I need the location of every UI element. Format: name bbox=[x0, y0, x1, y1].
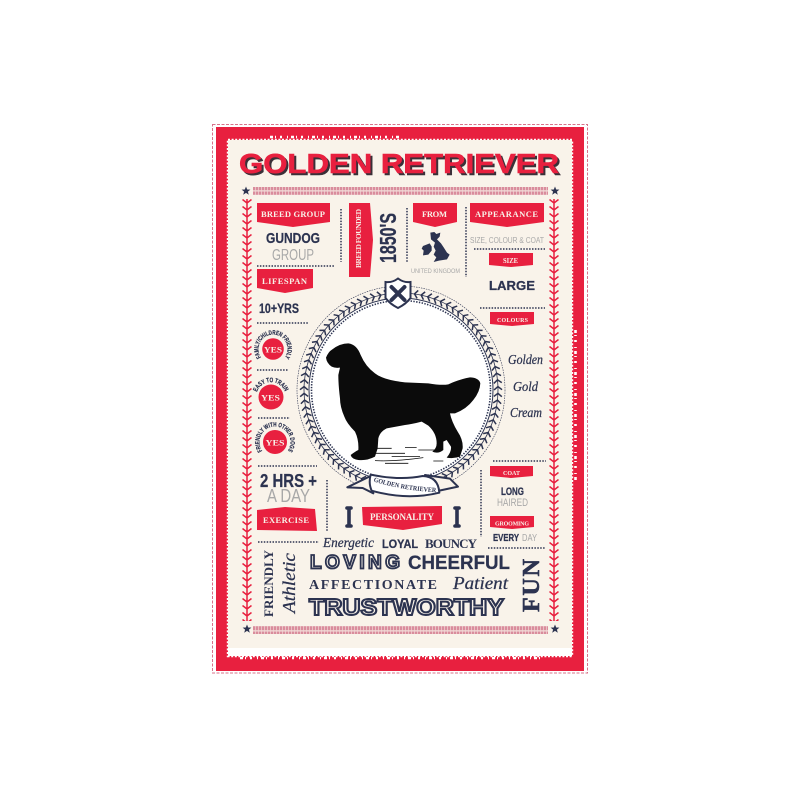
breed founded: 1850'S bbox=[375, 213, 401, 263]
lifespan: 10+YRS bbox=[259, 301, 299, 316]
colours: Gold bbox=[513, 380, 539, 395]
exercise: A DAY bbox=[267, 486, 310, 506]
icon: bone right bbox=[455, 508, 459, 526]
appearance: SIZE, COLOUR & COAT bbox=[470, 236, 544, 245]
breed founded: BREED FOUNDED bbox=[354, 208, 363, 268]
dog silhouette bbox=[326, 343, 480, 463]
from: united kingdom: UNITED KINGDOM bbox=[411, 268, 460, 275]
ribbon banner: GOLDEN RETRIEVER bbox=[374, 478, 436, 492]
top stripe divider bbox=[242, 186, 559, 195]
cream paper panel bbox=[228, 140, 572, 648]
size: SIZE bbox=[503, 257, 518, 265]
coat: COAT bbox=[503, 470, 521, 477]
personality bbox=[347, 506, 459, 530]
personality: PERSONALITY bbox=[370, 512, 434, 522]
grooming bbox=[490, 516, 537, 544]
badge: easy to train bbox=[252, 378, 289, 410]
shield emblem bbox=[386, 278, 410, 308]
icon: UK map bbox=[422, 232, 450, 262]
left herringbone border bbox=[241, 199, 253, 621]
badge: friendly with other dogs: FRIENDLY WITH OTHER DOGS bbox=[254, 422, 295, 453]
appearance: APPEARANCE bbox=[475, 209, 538, 219]
breed group: GROUP bbox=[272, 247, 314, 264]
from: united kingdom bbox=[411, 203, 460, 275]
size: LARGE bbox=[489, 279, 535, 293]
colours: Golden bbox=[508, 353, 543, 368]
personality word cloud bbox=[261, 536, 545, 620]
personality word cloud: Athletic bbox=[279, 553, 299, 614]
personality word cloud: BOUNCY bbox=[425, 536, 478, 551]
personality word cloud: CHEERFUL bbox=[408, 553, 510, 574]
icon: bone left bbox=[347, 508, 351, 526]
red frame bbox=[216, 127, 584, 671]
coat bbox=[490, 466, 533, 509]
right herringbone border bbox=[548, 199, 560, 621]
size bbox=[489, 253, 535, 293]
personality word cloud: LOVING bbox=[310, 552, 400, 574]
coat: HAIRED bbox=[497, 497, 528, 509]
badge: family / children friendly: FAMILY/CHILDREN FRIENDLY bbox=[254, 330, 292, 360]
exercise bbox=[257, 471, 317, 531]
personality word cloud: TRUSTWORTHY bbox=[309, 594, 504, 620]
personality word cloud: Patient bbox=[452, 573, 509, 593]
poster border: dashed outline bbox=[212, 124, 588, 673]
ground marks bbox=[375, 448, 443, 463]
breed founded bbox=[349, 203, 401, 277]
badge: easy to train: EASY TO TRAIN bbox=[252, 378, 289, 392]
grooming: EVERY bbox=[493, 533, 519, 544]
personality word cloud: LOYAL bbox=[382, 537, 418, 551]
title: GOLDEN RETRIEVER bbox=[239, 148, 559, 179]
personality word cloud: FUN bbox=[519, 558, 545, 612]
colours: COLOURS bbox=[497, 318, 529, 324]
worn paper edges bbox=[240, 137, 576, 658]
ribbon banner bbox=[346, 474, 459, 498]
exercise: EXERCISE bbox=[263, 515, 309, 525]
personality word cloud: Energetic bbox=[322, 536, 375, 551]
grooming: GROOMING bbox=[495, 522, 529, 528]
colours: Cream bbox=[510, 406, 542, 421]
appearance bbox=[470, 203, 544, 245]
breed group bbox=[257, 203, 330, 264]
badge: friendly with other dogs: YES bbox=[266, 438, 285, 448]
breed group: BREED GROUP bbox=[261, 209, 325, 219]
from: united kingdom: FROM bbox=[422, 209, 447, 219]
bottom stripe divider bbox=[243, 624, 559, 634]
personality word cloud: FRIENDLY bbox=[261, 549, 276, 617]
lifespan bbox=[257, 269, 313, 316]
title: GOLDEN RETRIEVER bbox=[241, 150, 561, 181]
grooming: DAY bbox=[522, 533, 537, 544]
badge: family / children friendly: YES bbox=[264, 344, 282, 354]
colours bbox=[490, 312, 543, 421]
lifespan: LIFESPAN bbox=[262, 276, 308, 286]
badge: easy to train: YES bbox=[261, 392, 280, 402]
personality word cloud: AFFECTIONATE bbox=[309, 578, 437, 593]
stamp-edge paper bbox=[228, 140, 572, 656]
coat: LONG bbox=[501, 486, 524, 498]
breed group: GUNDOG bbox=[266, 230, 320, 247]
central dog medallion bbox=[296, 277, 506, 498]
exercise: 2 HRS + bbox=[260, 471, 317, 491]
